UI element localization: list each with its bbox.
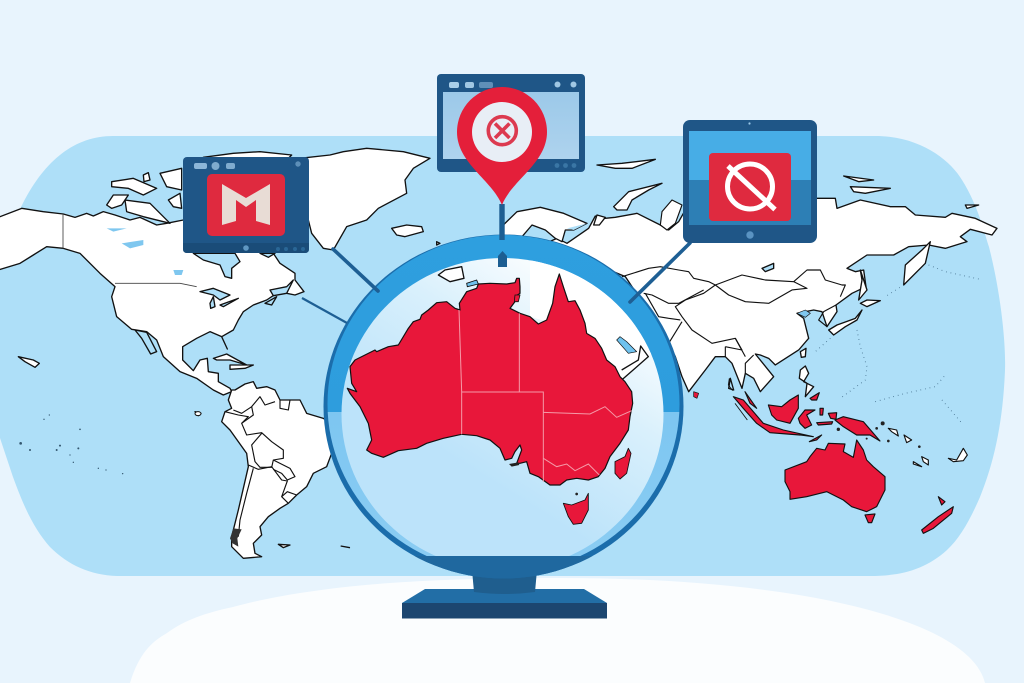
stand base top — [402, 589, 607, 603]
tasmania — [563, 493, 588, 524]
world map land — [0, 148, 997, 558]
magnifier ring with stand — [320, 234, 690, 618]
disc contents — [347, 257, 677, 524]
browser buttons — [449, 82, 459, 88]
australia large — [347, 274, 633, 524]
disc — [342, 258, 664, 570]
icon: prohibited — [728, 164, 775, 210]
pin centre — [472, 102, 532, 162]
icon: x in circle — [488, 117, 516, 145]
north america — [0, 152, 440, 416]
location pin stem — [499, 204, 505, 240]
ring chord — [414, 556, 592, 578]
eurasia — [502, 159, 997, 423]
stand neck — [472, 570, 537, 594]
ring band — [328, 235, 680, 573]
stem marker — [498, 251, 507, 267]
connector: envelope card to ring — [333, 249, 378, 291]
tablet card — [683, 120, 817, 243]
window buttons — [194, 163, 207, 169]
asia land within disc — [438, 260, 652, 380]
location pin — [457, 87, 547, 205]
world map backdrop — [0, 136, 1005, 576]
state borders — [459, 310, 632, 482]
red blocked tile — [709, 153, 791, 221]
greenland — [300, 148, 430, 250]
browser window card — [437, 74, 585, 172]
tablet screen — [689, 131, 811, 180]
pacific islands — [19, 412, 201, 474]
stand base front — [402, 603, 607, 618]
lakes — [107, 228, 183, 275]
browser screen — [443, 92, 579, 159]
card footer — [183, 243, 309, 253]
chile islands — [230, 528, 242, 547]
ring outer — [324, 234, 684, 578]
southeast asia and oceania — [728, 378, 967, 533]
connector: lower left line — [302, 298, 347, 323]
window card: M app — [183, 157, 309, 253]
ground ellipse — [130, 578, 985, 683]
south america — [222, 382, 350, 558]
tablet controls — [748, 122, 751, 125]
icon: M — [222, 184, 270, 225]
offshore island — [615, 448, 631, 479]
red M tile — [207, 174, 285, 236]
connector: tablet to ring — [630, 243, 690, 302]
baja gulf — [135, 330, 157, 354]
